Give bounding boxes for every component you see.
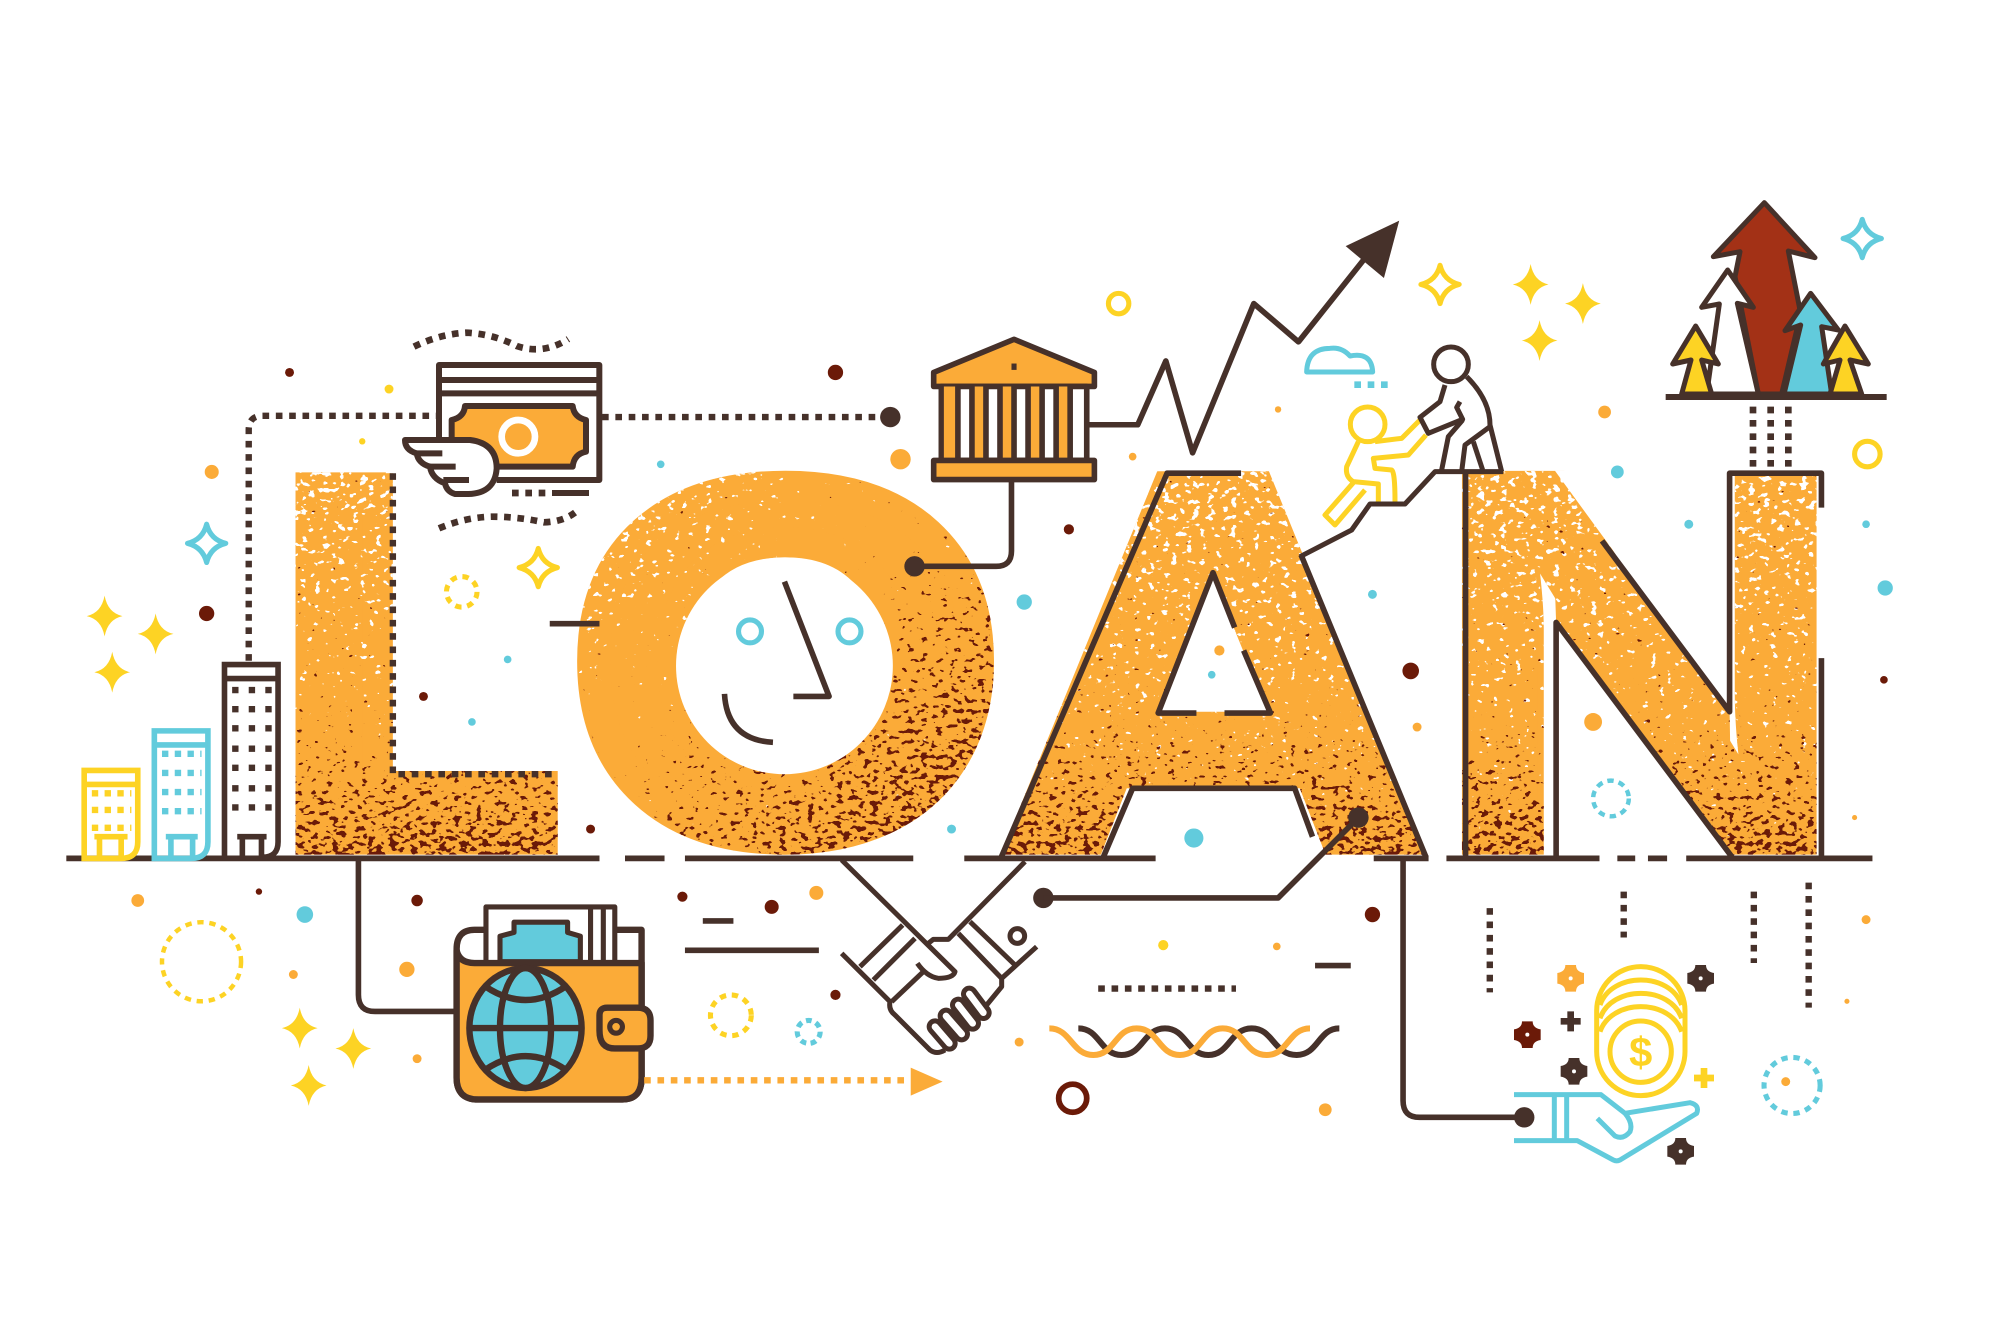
vertical and horizontal dotted lines — [1098, 883, 1809, 1008]
icon: climbing yellow person — [1325, 407, 1426, 525]
letter outlines — [393, 473, 1821, 857]
connector: bank to O — [904, 480, 1011, 577]
icon: flying money — [405, 333, 599, 528]
baseline — [66, 856, 1872, 861]
illustration: LOAN word art — [66, 200, 1893, 1165]
orange dots — [131, 406, 1871, 1116]
big letters LOAN: O — [571, 382, 1001, 941]
connector: handshake to A — [1033, 807, 1369, 908]
icon: brown tower — [224, 665, 278, 857]
A counter — [1161, 577, 1268, 712]
big letters LOAN — [276, 355, 1854, 969]
dollar sign: $ — [1629, 1029, 1652, 1076]
face in the O — [676, 557, 893, 774]
climbing step line — [1300, 472, 1503, 557]
icon: upward arrows — [1666, 203, 1887, 467]
N counters — [1555, 471, 1730, 856]
dashes — [550, 624, 1351, 966]
letter speckle texture — [287, 466, 1824, 861]
sparkles around coins — [1514, 965, 1714, 1165]
icon: cyan building — [154, 731, 208, 858]
connector: baseline to hand — [1403, 858, 1534, 1128]
big letters LOAN: A — [994, 359, 1432, 964]
outlined sparkles — [188, 219, 1881, 587]
dark red dots — [199, 365, 1888, 1000]
icon: cloud — [1307, 348, 1391, 385]
dotted orange arrow — [644, 1068, 943, 1096]
solid yellow sparkles — [87, 264, 1601, 1106]
icon: helping person — [1420, 347, 1502, 472]
wave lines — [1049, 1028, 1339, 1055]
icon: yellow building — [84, 770, 138, 858]
connector: dotted line building to money — [249, 416, 436, 661]
climbing person, helper, steps and cloud — [1300, 347, 1503, 557]
big letters LOAN: L — [276, 374, 560, 952]
connector: dotted line to bank — [602, 407, 901, 427]
connector: baseline to wallet — [358, 858, 457, 1011]
icon: hand with coins — [1514, 965, 1714, 1165]
icon: bank — [934, 339, 1094, 480]
rings — [162, 293, 1880, 1114]
chart line arrow — [1088, 221, 1399, 453]
icon: handshake — [842, 860, 1037, 1052]
cyan dots — [297, 460, 1893, 923]
big letters LOAN: N — [1425, 355, 1854, 969]
icon: wallet — [457, 907, 651, 1099]
yellow dots — [359, 385, 1168, 950]
